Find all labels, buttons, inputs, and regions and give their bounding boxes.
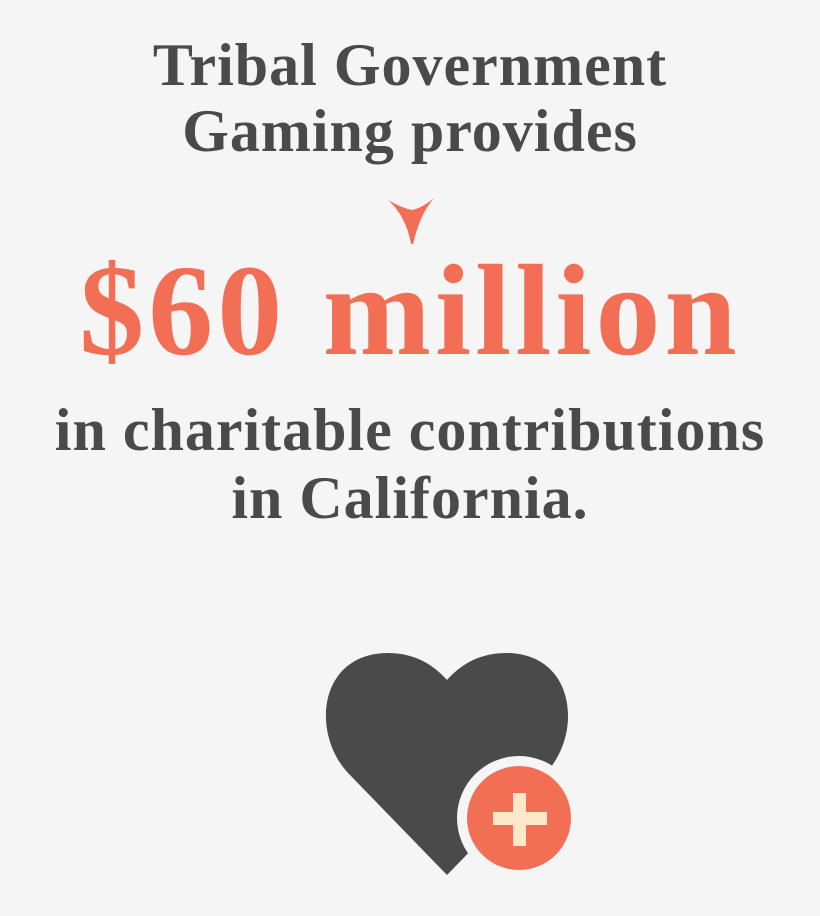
title: Tribal Government [153, 32, 667, 98]
subtitle text [55, 397, 765, 531]
headline figure: $60 million [79, 239, 741, 383]
title [153, 32, 667, 164]
title: Gaming provides [182, 98, 638, 164]
subtitle text: in California. [231, 465, 589, 531]
subtitle text: in charitable contributions [55, 397, 765, 463]
icon: arrow pointer [388, 198, 434, 244]
